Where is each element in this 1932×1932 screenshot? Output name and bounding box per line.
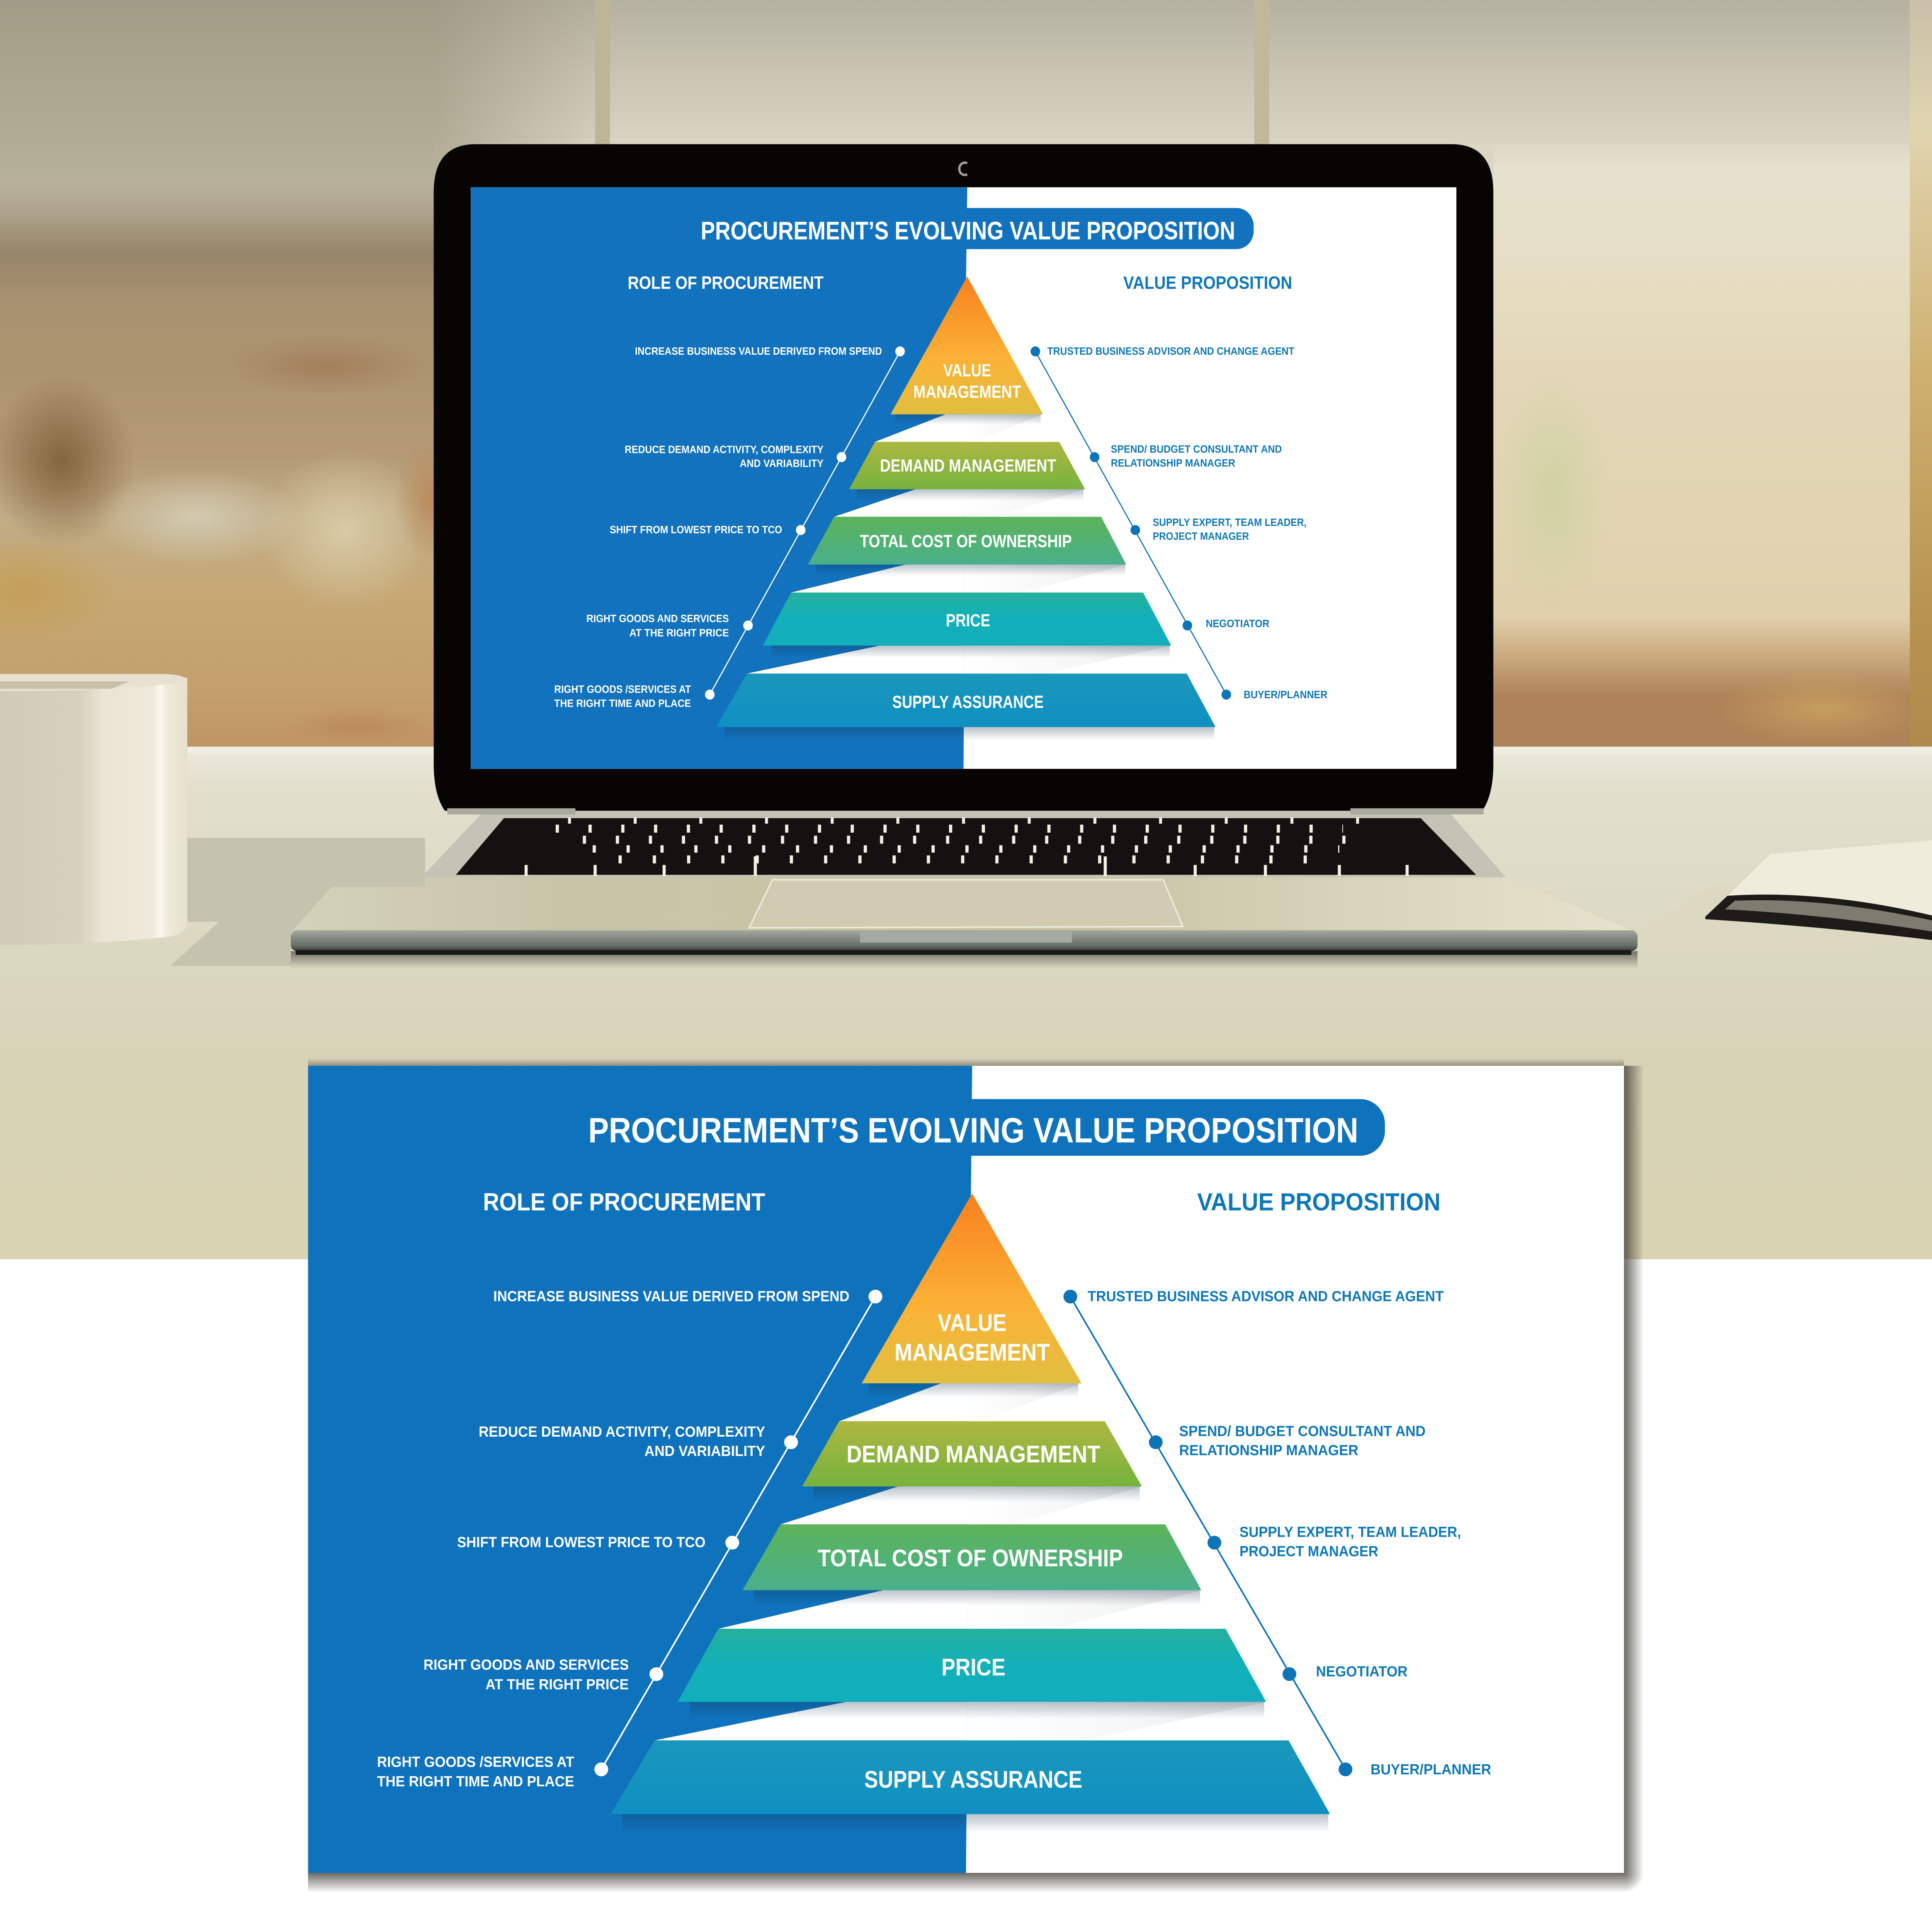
- tier: value management: [862, 1194, 1082, 1383]
- title pill: PROCUREMENT’S EVOLVING VALUE PROPOSITION: [588, 1111, 1358, 1150]
- role labels: THE RIGHT TIME AND PLACE: [377, 1773, 574, 1790]
- tier: total cost of ownership: [743, 1524, 1201, 1590]
- laptop: [291, 144, 1638, 955]
- main panel: [308, 1066, 1624, 1873]
- laptop screen: [471, 187, 1456, 769]
- screen diagram: INCREASE BUSINESS VALUE DERIVED FROM SPEND: [635, 345, 882, 357]
- title pill: [588, 1099, 1385, 1156]
- screen diagram: REDUCE DEMAND ACTIVITY, COMPLEXITY: [625, 443, 823, 456]
- screen diagram: ROLE OF PROCUREMENT: [628, 272, 824, 293]
- value proposition labels: SUPPLY EXPERT, TEAM LEADER,: [1240, 1524, 1461, 1541]
- notebook on desk: [1705, 840, 1932, 940]
- tier: price: PRICE: [941, 1654, 1005, 1681]
- role labels: AT THE RIGHT PRICE: [485, 1676, 629, 1693]
- photo background: desk scene: [0, 0, 1932, 1259]
- role labels: SHIFT FROM LOWEST PRICE TO TCO: [457, 1534, 706, 1551]
- panel shadow: [308, 1058, 1644, 1893]
- value proposition labels: PROJECT MANAGER: [1240, 1543, 1378, 1560]
- screen diagram: SUPPLY EXPERT, TEAM LEADER,: [1153, 516, 1306, 528]
- screen diagram: PRICE: [946, 611, 990, 630]
- laptop base: [291, 811, 1638, 955]
- coffee mug: [0, 674, 187, 945]
- screen diagram: THE RIGHT TIME AND PLACE: [554, 697, 691, 709]
- keyboard key gaps: [526, 821, 1407, 876]
- screen diagram: AND VARIABILITY: [740, 457, 823, 469]
- value proposition labels: BUYER/PLANNER: [1371, 1761, 1491, 1778]
- right connector line with dots: [1063, 1290, 1352, 1776]
- screen diagram: TRUSTED BUSINESS ADVISOR AND CHANGE AGENT: [1047, 345, 1294, 357]
- heading: role of procurement: ROLE OF PROCUREMENT: [483, 1188, 765, 1216]
- tier: demand management: DEMAND MANAGEMENT: [847, 1440, 1100, 1468]
- screen diagram: RIGHT GOODS AND SERVICES: [587, 612, 729, 624]
- value proposition labels: SPEND/ BUDGET CONSULTANT AND: [1179, 1423, 1425, 1440]
- screen diagram: VALUE PROPOSITION: [1123, 272, 1292, 293]
- tier: supply assurance: [611, 1740, 1330, 1814]
- tier: total cost of ownership: TOTAL COST OF OWNERSHIP: [818, 1545, 1123, 1572]
- tier: value management: MANAGEMENT: [895, 1339, 1050, 1366]
- screen diagram: TOTAL COST OF OWNERSHIP: [860, 532, 1072, 551]
- screen diagram: BUYER/PLANNER: [1244, 688, 1328, 701]
- tier: price: [678, 1629, 1266, 1702]
- screen diagram: [554, 208, 1328, 740]
- screen diagram: VALUE: [943, 361, 991, 380]
- role labels: RIGHT GOODS /SERVICES AT: [377, 1754, 574, 1770]
- screen diagram: SHIFT FROM LOWEST PRICE TO TCO: [610, 523, 782, 536]
- role labels: [377, 1288, 849, 1790]
- screen diagram: RELATIONSHIP MANAGER: [1111, 457, 1235, 469]
- screen diagram: PROJECT MANAGER: [1153, 530, 1249, 542]
- table edge highlight: [0, 747, 1932, 754]
- value proposition labels: TRUSTED BUSINESS ADVISOR AND CHANGE AGENT: [1088, 1288, 1444, 1304]
- value proposition labels: RELATIONSHIP MANAGER: [1179, 1442, 1359, 1459]
- screen diagram: AT THE RIGHT PRICE: [629, 627, 729, 639]
- screen diagram: DEMAND MANAGEMENT: [880, 456, 1056, 476]
- heading: value proposition: VALUE PROPOSITION: [1197, 1188, 1440, 1216]
- left connector line with dots: [594, 1290, 882, 1776]
- tier: supply assurance: SUPPLY ASSURANCE: [864, 1766, 1082, 1793]
- tier: demand management: [802, 1421, 1142, 1486]
- value proposition labels: NEGOTIATOR: [1316, 1663, 1408, 1680]
- role labels: AND VARIABILITY: [645, 1443, 765, 1459]
- value proposition labels: [1088, 1288, 1491, 1778]
- laptop lid: [434, 144, 1493, 811]
- screen diagram: NEGOTIATOR: [1206, 617, 1270, 629]
- screen diagram: SUPPLY ASSURANCE: [892, 692, 1044, 712]
- laptop shadow on the table: [170, 838, 1885, 968]
- screen diagram: PROCUREMENT’S EVOLVING VALUE PROPOSITION: [701, 216, 1235, 245]
- screen diagram: MANAGEMENT: [913, 383, 1021, 402]
- screen diagram: SPEND/ BUDGET CONSULTANT AND: [1111, 443, 1282, 455]
- screen diagram: RIGHT GOODS /SERVICES AT: [554, 683, 691, 695]
- role labels: INCREASE BUSINESS VALUE DERIVED FROM SPEND: [493, 1288, 849, 1304]
- pyramid: [611, 1194, 1330, 1832]
- role labels: REDUCE DEMAND ACTIVITY, COMPLEXITY: [479, 1423, 765, 1440]
- webcam: [959, 163, 967, 175]
- hinge corners: [447, 808, 1483, 815]
- role labels: RIGHT GOODS AND SERVICES: [423, 1656, 629, 1673]
- tier: value management: VALUE: [938, 1310, 1007, 1337]
